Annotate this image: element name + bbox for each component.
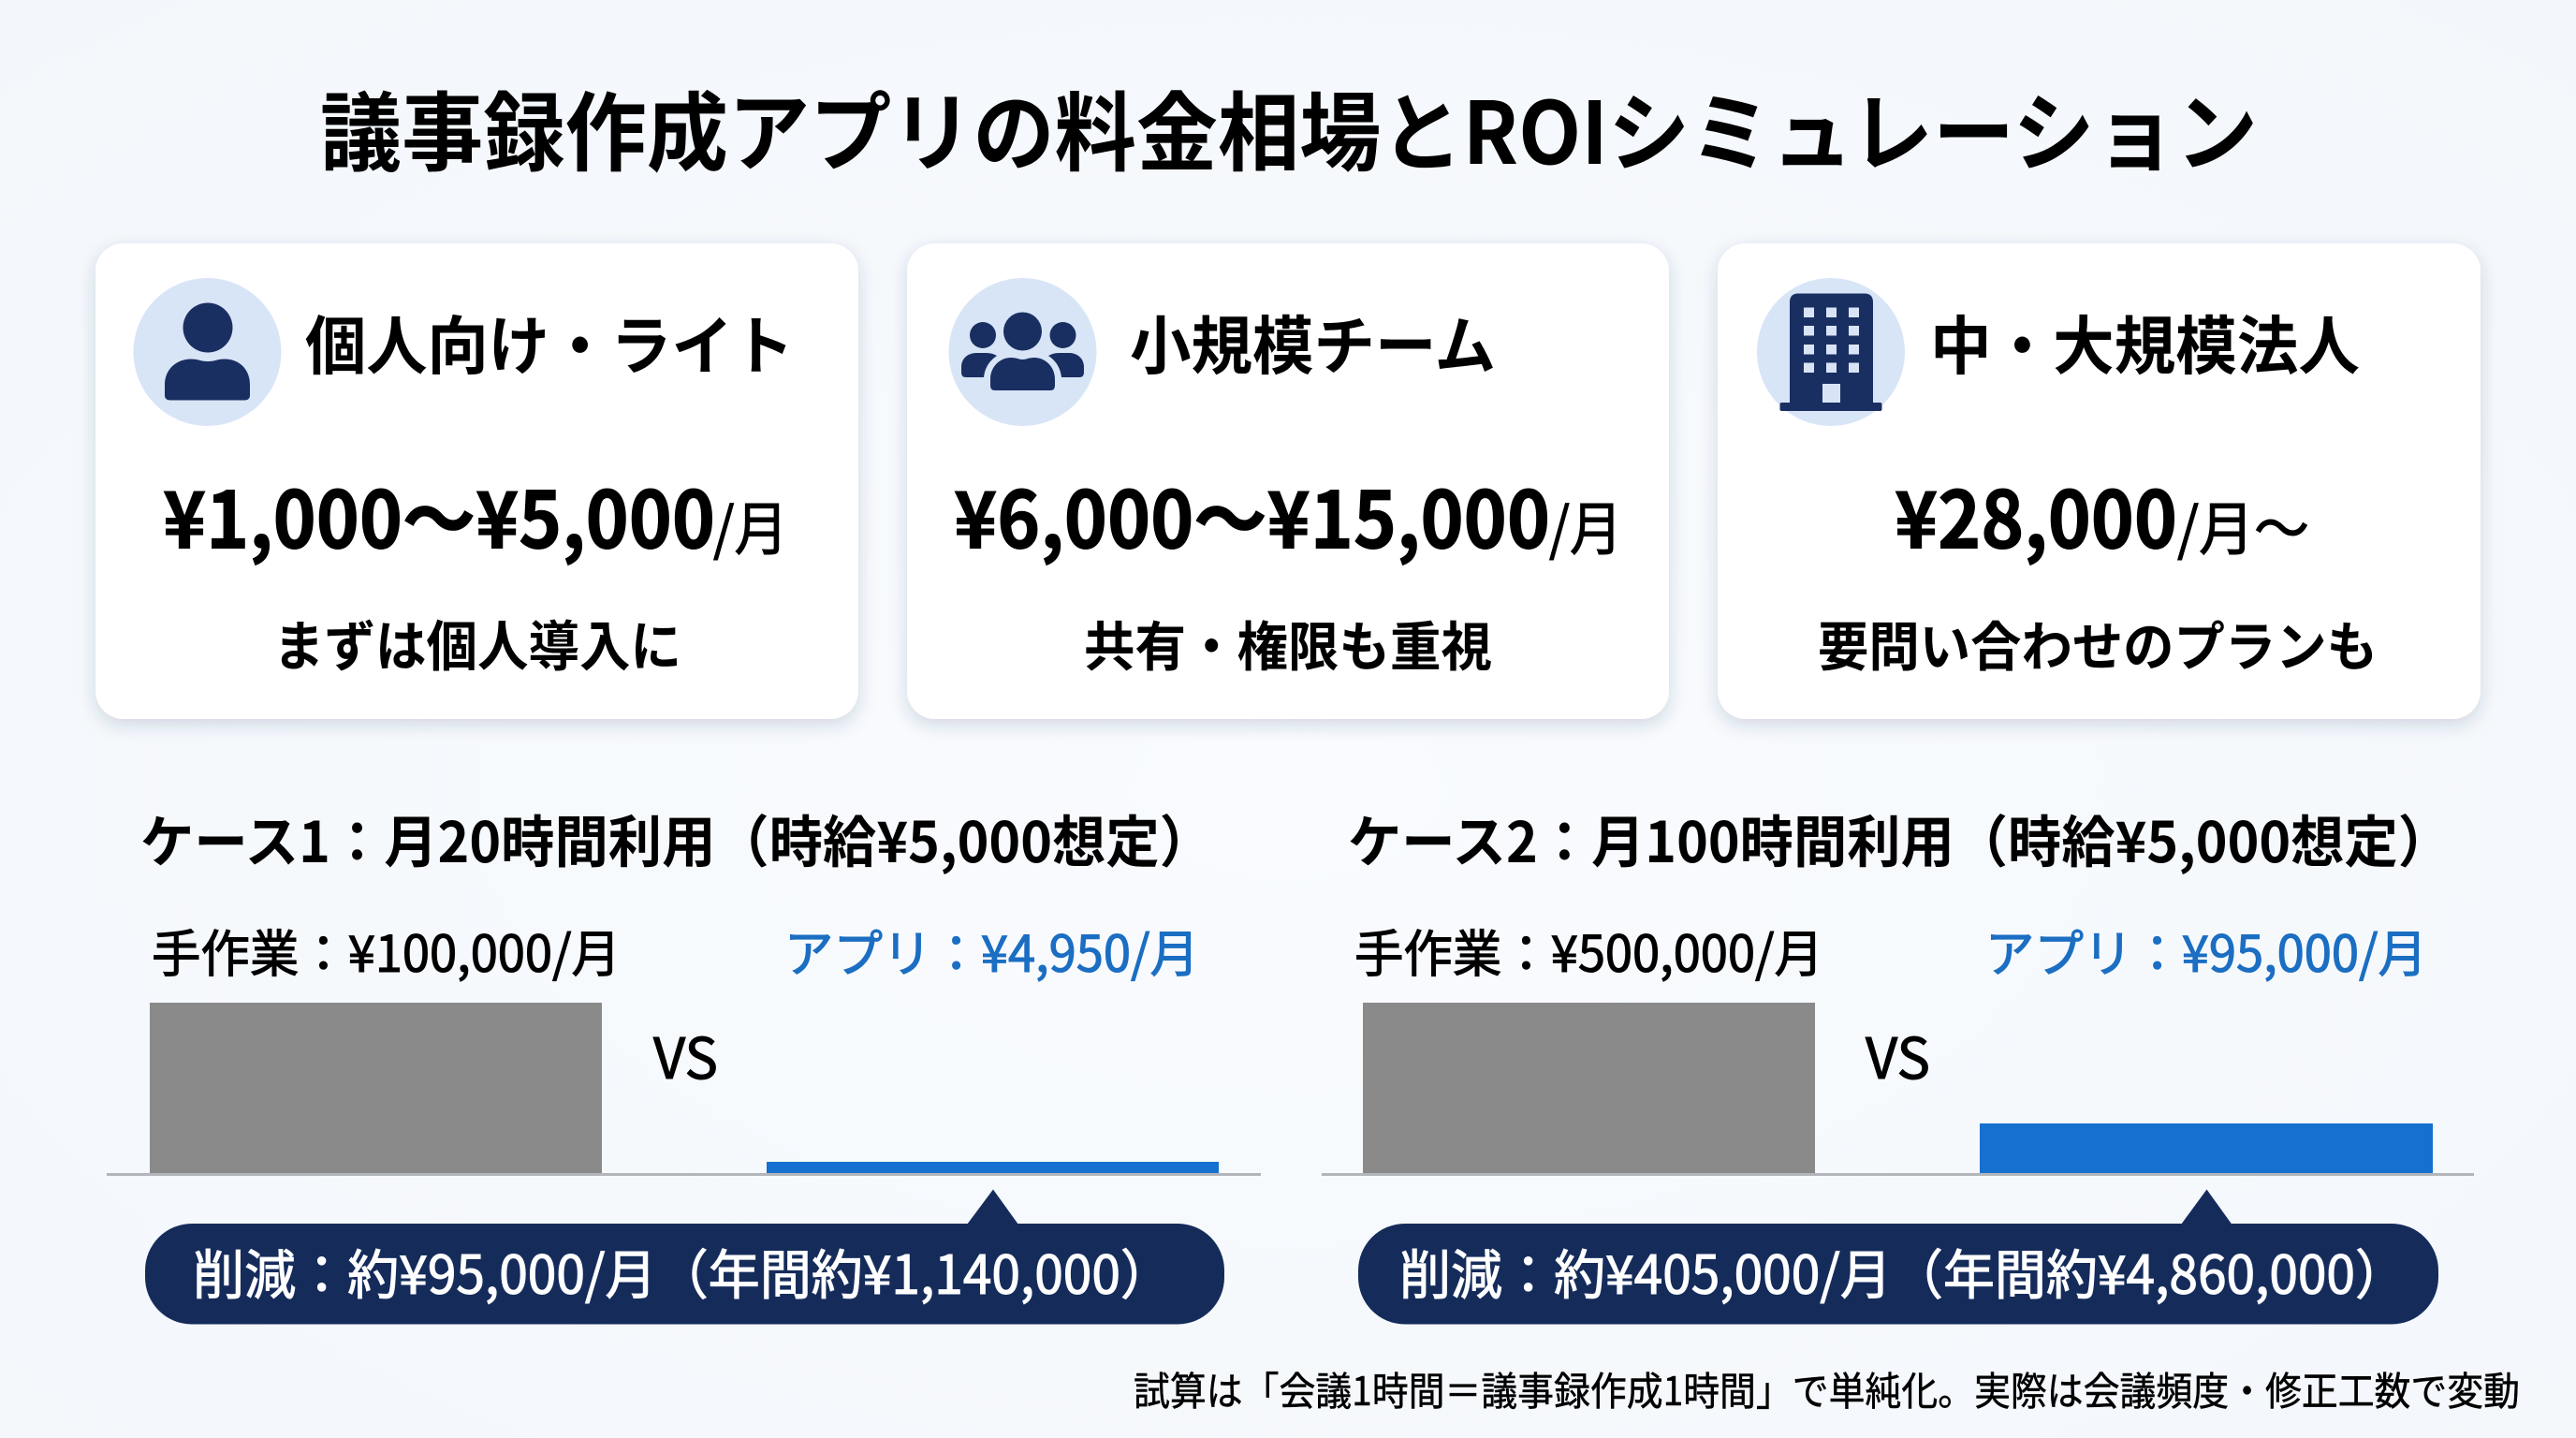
savings callout — [145, 1189, 1224, 1324]
panel: case 2 — [1322, 798, 2474, 1324]
price: /月〜 — [2177, 482, 2309, 566]
savings callout: 削減：約¥405,000/月（年間約¥4,860,000） — [1399, 1233, 2407, 1310]
icon: team — [949, 278, 1097, 426]
price: /月 — [1549, 482, 1622, 566]
price: ¥28,000 — [1895, 459, 2177, 571]
card note: 要問い合わせのプランも — [1818, 605, 2378, 682]
card background — [95, 243, 858, 719]
savings callout: 削減：約¥95,000/月（年間約¥1,140,000） — [193, 1233, 1172, 1310]
manual cost label: 手作業：¥500,000/月 — [1354, 913, 1823, 987]
app cost label: アプリ：¥95,000/月 — [1985, 913, 2427, 987]
card note: 共有・権限も重視 — [1084, 605, 1492, 682]
price: /月 — [713, 482, 788, 566]
case heading: ケース2：月100時間利用（時給¥5,000想定） — [1348, 798, 2452, 879]
icon: office building — [1757, 278, 1905, 426]
title: 議事録作成アプリの料金相場とROIシミュレーション — [320, 65, 2258, 189]
panel: enterprise card — [1718, 243, 2481, 719]
price: ¥6,000〜¥15,000 — [954, 459, 1550, 571]
card background — [1718, 243, 2481, 719]
panel: small team card — [907, 243, 1669, 719]
app cost label: アプリ：¥4,950/月 — [784, 913, 1199, 987]
vs label: VS — [653, 1014, 718, 1095]
icon: person — [133, 278, 281, 426]
card heading: 中・大規模法人 — [1930, 295, 2360, 388]
card heading: 個人向け・ライト — [305, 295, 794, 388]
case heading: ケース1：月20時間利用（時給¥5,000想定） — [140, 798, 1213, 879]
bar chart — [107, 1003, 1261, 1176]
panel: individual plan card — [95, 243, 858, 719]
price: ¥1,000〜¥5,000 — [163, 459, 715, 571]
vs label: VS — [1866, 1014, 1930, 1095]
manual cost label: 手作業：¥100,000/月 — [152, 913, 621, 987]
card note: まずは個人導入に — [273, 603, 681, 682]
savings callout — [1358, 1189, 2438, 1324]
panel: case 1 — [107, 798, 1261, 1324]
card heading: 小規模チーム — [1130, 295, 1496, 388]
card background — [907, 243, 1669, 719]
bar chart — [1322, 1003, 2474, 1176]
